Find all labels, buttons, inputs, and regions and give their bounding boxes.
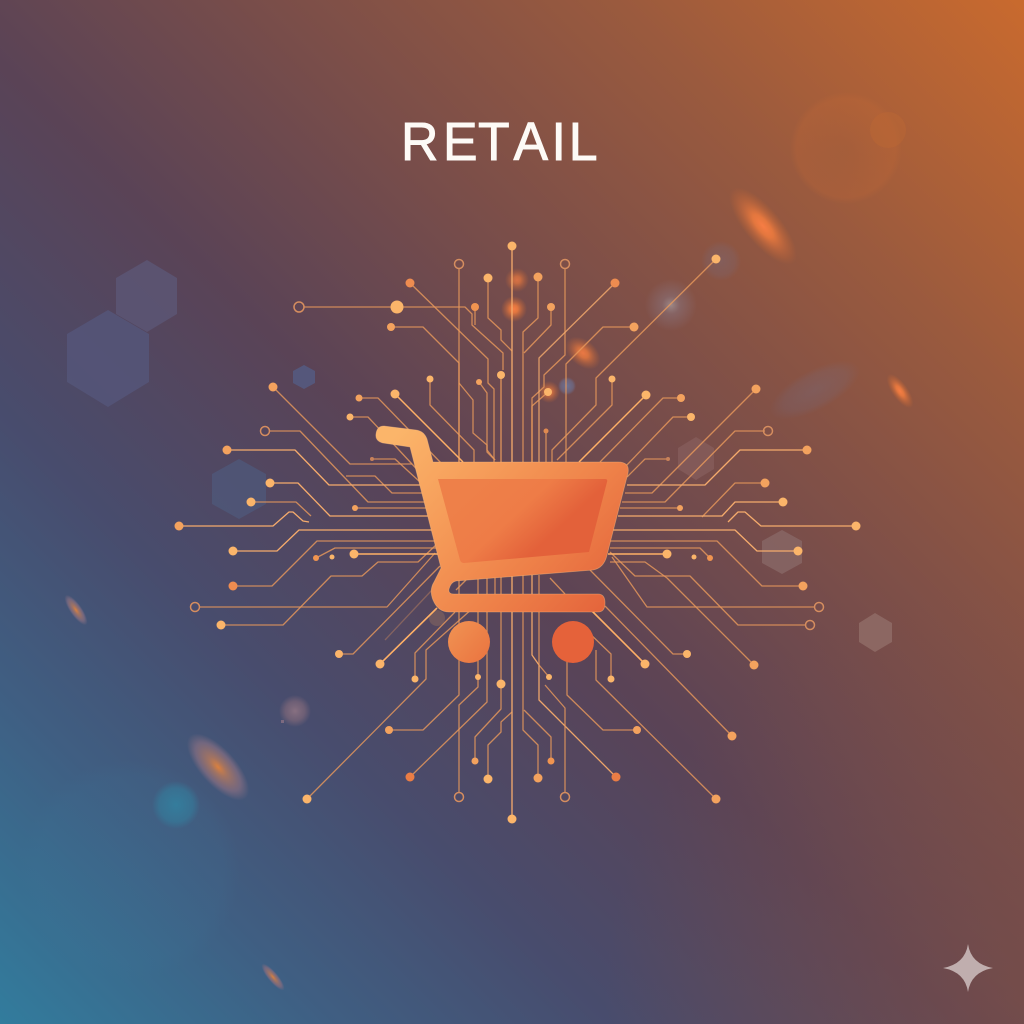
cart right wheel <box>552 621 594 663</box>
cart body and handle <box>376 426 628 612</box>
nodes: lower right <box>534 546 824 804</box>
hexagon: large upper left <box>67 310 149 407</box>
traces: lower left <box>199 530 512 819</box>
cart left wheel <box>448 621 490 663</box>
hexagon: right <box>762 530 802 574</box>
hexagon: mid left <box>212 459 266 519</box>
lens flares and bokeh <box>61 92 918 993</box>
circuit traces <box>179 246 856 819</box>
hexagon: mid right <box>678 437 714 480</box>
nodes: upper left <box>174 242 516 530</box>
circuit nodes <box>174 242 860 824</box>
title: RETAIL <box>401 112 598 172</box>
traces: upper right <box>523 259 856 526</box>
icon: sparkle watermark <box>943 944 993 992</box>
hexagon: far right <box>859 613 892 652</box>
nodes: upper right <box>534 254 860 530</box>
traces: lower right <box>523 530 815 799</box>
hexagon: small left <box>293 365 315 389</box>
cart basket panel <box>438 479 607 563</box>
nodes: lower left <box>190 546 516 824</box>
hexagon: upper left <box>116 260 177 332</box>
traces: upper left <box>179 246 512 526</box>
icon: shopping cart <box>376 426 628 663</box>
